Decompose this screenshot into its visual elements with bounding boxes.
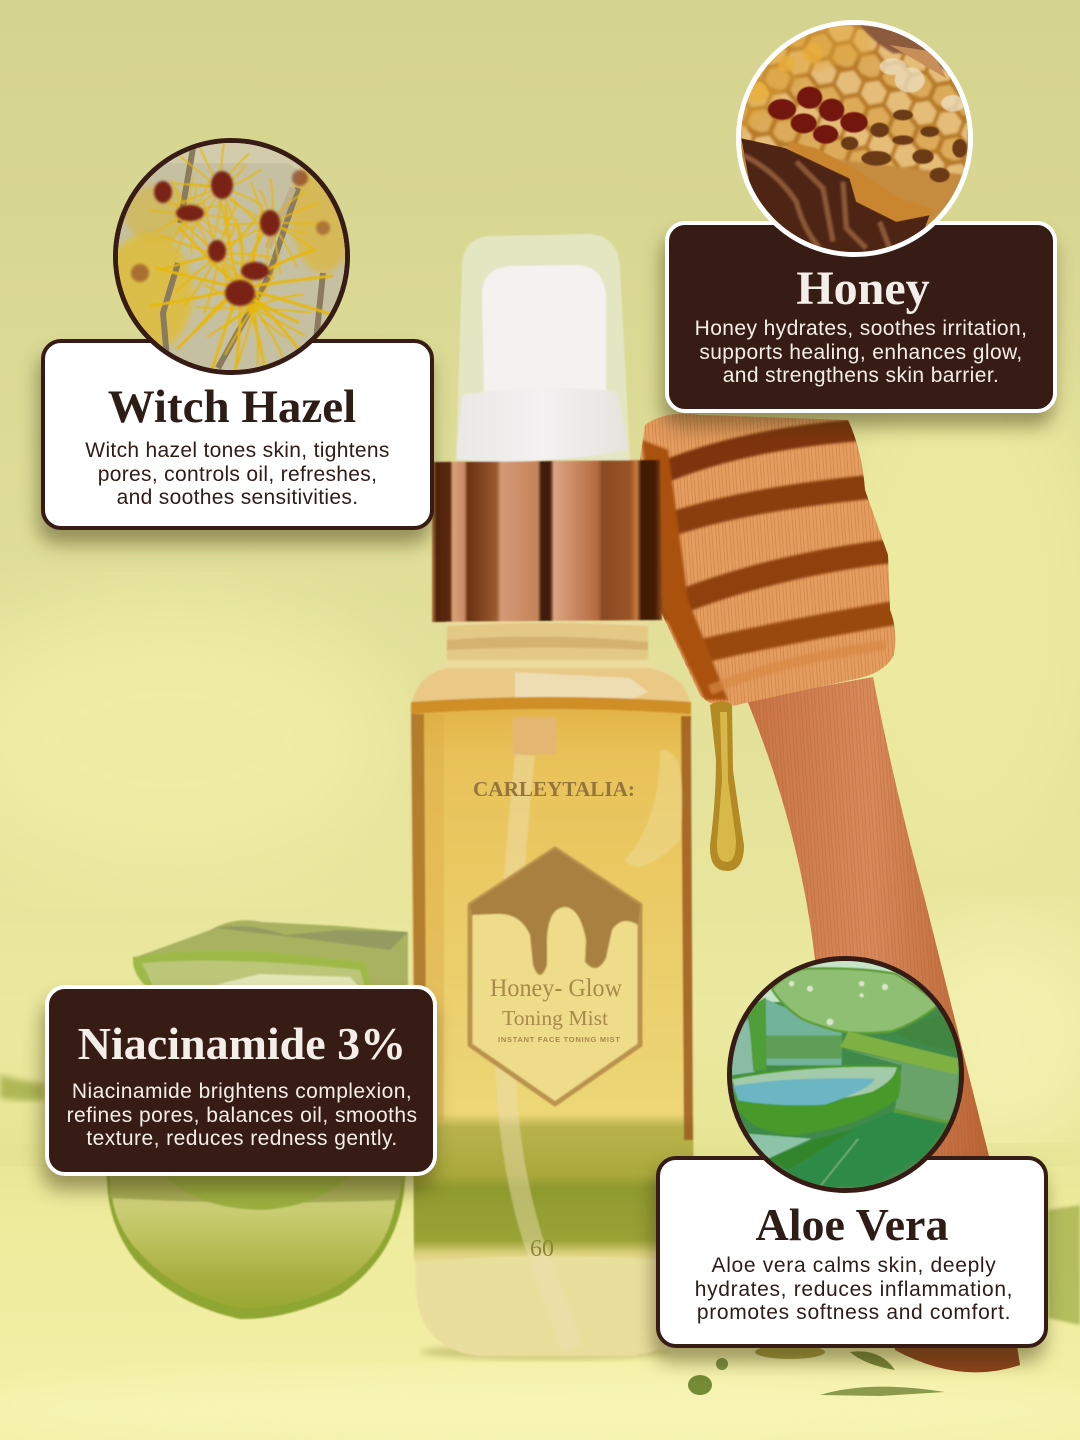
- text: aloe vera description: hydrates, reduces inflammation,: [695, 1278, 1013, 1301]
- bottle: Toning Mist: [502, 1006, 608, 1030]
- heading: honey: Honey: [796, 262, 930, 315]
- bottle: [409, 234, 694, 1360]
- card: witch hazel: [41, 339, 434, 530]
- card: aloe vera: [656, 1156, 1048, 1348]
- icon: witch hazel photo: [113, 138, 350, 375]
- text: honey description: supports healing, enhances glow,: [699, 341, 1023, 364]
- text: aloe vera description: Aloe vera calms skin, deeply: [712, 1254, 996, 1277]
- bottle: Honey- Glow: [490, 975, 622, 1002]
- honey dipper: [640, 414, 1020, 1396]
- heading: witch hazel: Witch Hazel: [108, 381, 356, 433]
- text: niacinamide description: Niacinamide brightens complexion,: [72, 1080, 412, 1103]
- text: witch hazel description: and soothes sensitivities.: [117, 486, 358, 509]
- text: niacinamide description: refines pores, balances oil, smooths: [67, 1104, 417, 1127]
- text: honey description: Honey hydrates, soothes irritation,: [695, 317, 1027, 340]
- text: niacinamide description: texture, reduces redness gently.: [86, 1127, 398, 1150]
- bottle: INSTANT FACE TONING MIST: [498, 1035, 620, 1044]
- bottle: 60: [530, 1236, 554, 1262]
- card: honey: [665, 221, 1057, 413]
- text: honey description: [695, 317, 1027, 387]
- icon: honeycomb photo: [736, 20, 973, 257]
- heading: niacinamide 3%: Niacinamide 3%: [78, 1018, 406, 1069]
- honey drip: [710, 702, 744, 871]
- text: witch hazel description: Witch hazel tones skin, tightens: [85, 439, 390, 462]
- icon: aloe vera photo: [727, 956, 964, 1193]
- card: niacinamide: [45, 985, 437, 1176]
- bottle: CARLEYTALIA:: [473, 777, 635, 801]
- text: niacinamide description: [67, 1080, 417, 1150]
- heading: aloe vera: Aloe Vera: [756, 1199, 948, 1250]
- text: honey description: and strengthens skin barrier.: [723, 364, 999, 387]
- text: aloe vera description: [695, 1254, 1013, 1324]
- text: witch hazel description: pores, controls oil, refreshes,: [98, 463, 377, 486]
- text: aloe vera description: promotes softness and comfort.: [697, 1301, 1011, 1324]
- text: witch hazel description: [85, 439, 390, 509]
- aloe vera pieces: [0, 920, 1080, 1325]
